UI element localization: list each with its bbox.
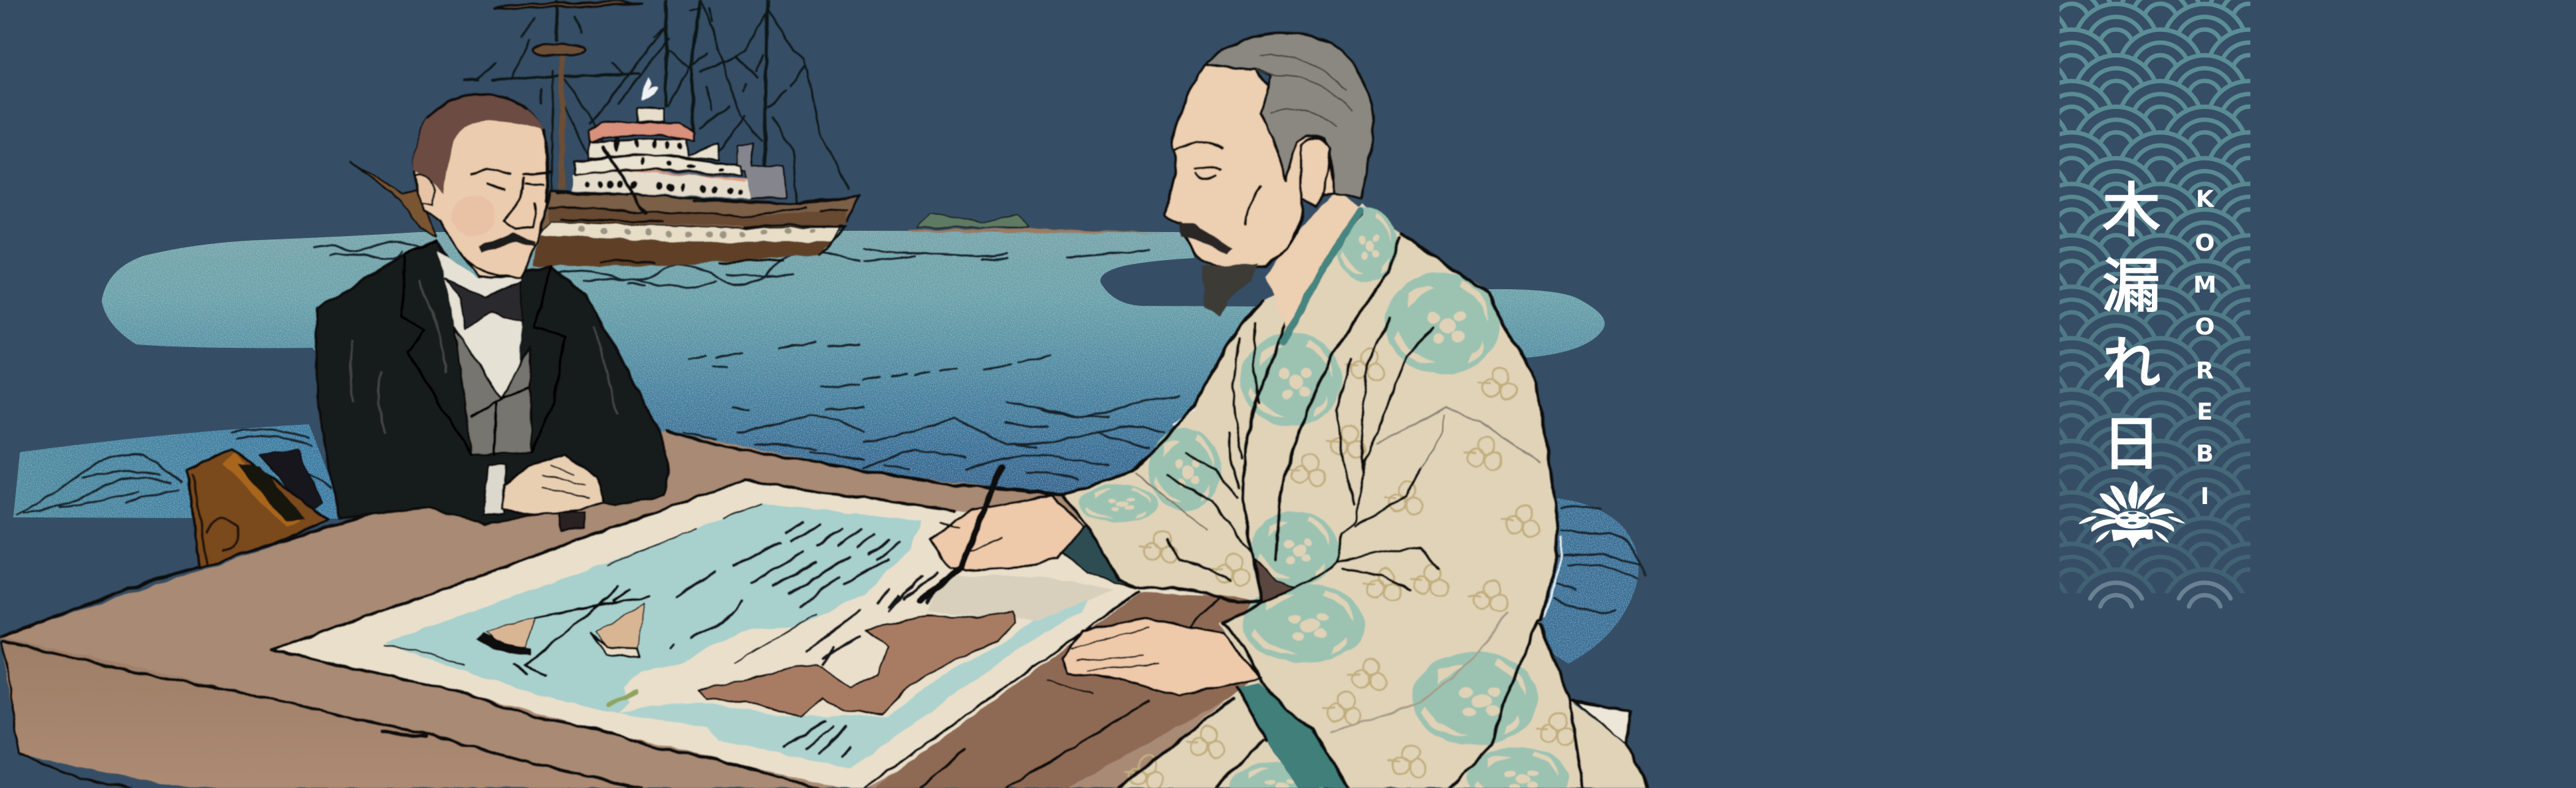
resting hand	[1047, 618, 1261, 696]
kanji title: 日	[2102, 411, 2161, 477]
cheek blush	[452, 196, 496, 236]
man in kimono	[864, 33, 1648, 788]
romaji title: O	[2195, 230, 2214, 257]
brush	[920, 467, 1002, 600]
hair	[1206, 33, 1373, 199]
hair	[413, 94, 543, 194]
kanji title	[2102, 178, 2161, 477]
romaji title: O	[2195, 314, 2214, 340]
white hull band	[539, 221, 839, 243]
pattern fade	[2060, 0, 2250, 593]
lower deck	[572, 171, 752, 198]
hull dark stripe	[549, 206, 847, 226]
romaji title: M	[2193, 272, 2216, 299]
portholes	[578, 226, 815, 237]
steamship	[465, 0, 859, 266]
logo panel	[2060, 0, 2250, 609]
white halo	[1174, 410, 1562, 616]
map edge	[271, 480, 954, 788]
wooden board	[864, 592, 1266, 788]
land	[698, 612, 1016, 717]
main mast	[559, 57, 565, 190]
table edges	[0, 431, 1070, 788]
moustache	[479, 232, 534, 253]
robe	[1063, 203, 1648, 788]
head	[1165, 33, 1373, 342]
lotus emblem	[2079, 481, 2185, 548]
lower hull	[532, 235, 833, 266]
sea	[13, 231, 1639, 664]
case clasp	[223, 452, 300, 527]
map boat left	[486, 617, 536, 647]
man in suit	[317, 94, 668, 530]
neck and face	[414, 94, 548, 277]
ship yard	[494, 1, 642, 9]
kanji title: 漏	[2102, 253, 2161, 319]
moustache	[1179, 223, 1233, 254]
writing hand	[920, 467, 1084, 600]
face details	[427, 94, 551, 277]
obi wedge	[1255, 560, 1295, 603]
map paper	[271, 480, 1202, 788]
upper cabin	[588, 138, 720, 160]
shirt	[438, 251, 520, 400]
hull lines	[549, 146, 859, 264]
table top	[0, 431, 1263, 788]
white cloth	[1576, 702, 1630, 743]
romaji title	[2193, 186, 2216, 510]
table front face	[0, 637, 641, 788]
ear	[414, 174, 435, 206]
foreground scene	[0, 0, 1648, 788]
grey stacks	[737, 144, 786, 198]
map islet	[609, 692, 638, 705]
ship rigging	[465, 0, 849, 213]
kanji title: 木	[2102, 178, 2161, 243]
middle deck	[575, 154, 741, 176]
romaji title: K	[2196, 186, 2215, 213]
vest	[455, 327, 532, 455]
bow tie	[445, 279, 522, 329]
face	[1165, 65, 1337, 268]
paper stain	[927, 577, 1115, 620]
ink bottle	[560, 511, 584, 530]
romaji title: B	[2196, 441, 2214, 467]
under kimono teal band	[1237, 684, 1348, 788]
map water south	[619, 594, 1093, 769]
ear	[1301, 138, 1329, 206]
facial features	[1174, 142, 1301, 267]
upper hull	[542, 191, 859, 231]
smoke	[642, 78, 658, 101]
romaji title: I	[2200, 483, 2209, 510]
case scroll	[193, 475, 238, 563]
crow's nest	[532, 44, 586, 56]
hand	[502, 455, 603, 515]
pink roof	[589, 122, 695, 142]
trailing arcs	[2090, 583, 2230, 606]
waves	[17, 243, 864, 515]
robe lines	[1063, 215, 1648, 788]
romaji title: E	[2197, 399, 2212, 426]
dark sleeve lining	[1056, 525, 1136, 589]
map boat right	[596, 603, 645, 650]
leather case	[187, 448, 328, 568]
map boat rigging	[514, 585, 649, 675]
map water	[384, 503, 922, 714]
jacket shading and lapels	[350, 281, 617, 432]
funnel	[637, 108, 664, 122]
wave pattern band	[2060, 0, 2250, 593]
kanji title: れ	[2102, 331, 2161, 397]
map ink strokes	[384, 504, 954, 756]
distant island	[907, 213, 1164, 233]
robe gold motifs	[1125, 349, 1574, 788]
teal collar	[1283, 211, 1360, 342]
goatee	[1201, 264, 1258, 317]
robe crests	[1079, 207, 1568, 788]
neck	[1266, 191, 1360, 327]
pink deck strip	[625, 170, 748, 183]
romaji title: R	[2196, 358, 2214, 384]
collar spike	[350, 162, 435, 236]
cuff	[484, 465, 506, 515]
jacket	[317, 240, 668, 523]
hair strands	[1255, 55, 1352, 126]
ship windows	[585, 136, 743, 196]
